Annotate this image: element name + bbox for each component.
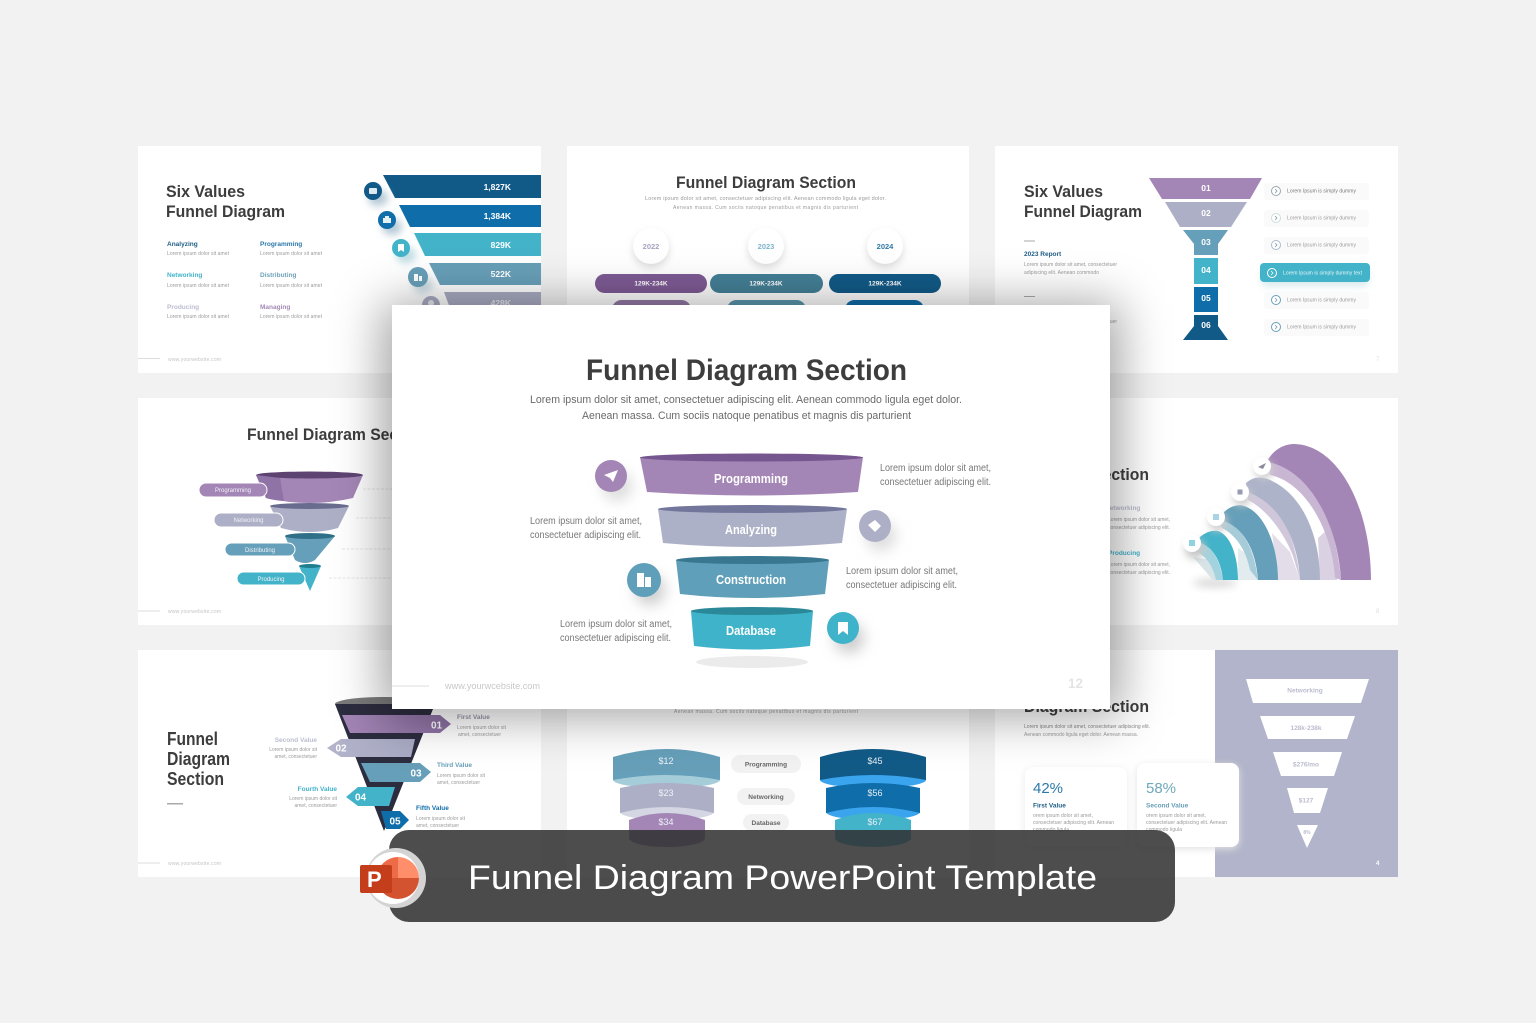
text block: value list: Lorem ipsum dolor sit amet: [260, 283, 323, 289]
panel: arc funnel slide (middle right): [960, 398, 1398, 625]
title: Funnel Diagram Section: [586, 354, 907, 387]
chart: right stacked funnel: [820, 749, 926, 847]
year badges: 2024: [877, 242, 894, 251]
text block: value list: Lorem ipsum dolor sit amet: [260, 251, 323, 257]
heading: Six Values: [1024, 182, 1103, 201]
label pills: [199, 483, 305, 585]
text: programming description: [880, 463, 991, 488]
footer: [138, 357, 221, 363]
icon: PowerPoint logo: P: [367, 867, 382, 892]
chart: hourglass funnel: [1149, 178, 1262, 340]
chart: horizontal funnel bars: 522K: [491, 269, 512, 279]
subtitle: Aenean massa. Cum sociis natoque penatibus et magnis dis parturient: [582, 410, 911, 422]
text block: value list: Lorem ipsum dolor sit amet: [167, 283, 230, 289]
value pills: 129K-234K: [868, 280, 902, 288]
chart: hourglass funnel: 03: [1201, 237, 1211, 247]
chart: right stacked funnel: $67: [867, 817, 883, 827]
footer: www.yourwebsite.com: [168, 357, 221, 363]
subtitle: [530, 394, 962, 422]
card: first value: consectetuer adipiscing elit. Aenean: [1033, 820, 1114, 826]
card: first value: commodo ligula: [1033, 827, 1069, 833]
value labels: Lorem ipsum dolor sit: [289, 796, 338, 802]
text block: Lorem ipsum dolor sit amet,: [1108, 562, 1170, 568]
panel: six values funnel slide (top left): [138, 146, 541, 373]
text block: value list: Programming: [260, 241, 302, 248]
chart: horizontal funnel bars: 428K: [491, 298, 512, 308]
text block: value list: Analyzing: [167, 241, 198, 248]
value labels: Fourth Value: [298, 786, 337, 793]
value labels: amet, consectetuer: [437, 780, 480, 786]
text: database description: consectetuer adipiscing elit.: [560, 633, 671, 644]
text block: Aenean massa. Cum sociis natoque penatibus et magnis dis parturient: [674, 709, 859, 715]
value labels: amet, consectetuer: [458, 732, 501, 738]
footer: [138, 861, 221, 867]
icon: paper plane: [595, 460, 632, 501]
text block: value list: Distributing: [260, 272, 296, 279]
text block: Networking: [1105, 505, 1140, 512]
heading: [167, 729, 230, 789]
text: programming description: Lorem ipsum dolor sit amet,: [880, 463, 991, 474]
panel: cone funnel slide (bottom left): [138, 650, 541, 877]
list rows: Lorem Ipsum is simply dummy: [1287, 324, 1356, 330]
divider: [167, 803, 183, 804]
list rows: Lorem Ipsum is simply dummy text: [1283, 270, 1363, 276]
funnel: construction: Construction: [716, 573, 786, 587]
text block: [645, 196, 886, 211]
text block: 2023 report: 2023 Report: [1024, 251, 1062, 258]
heading: Funnel Diagram Section: [676, 173, 856, 192]
value labels: Fifth Value: [416, 805, 449, 812]
value labels: amet, consectetuer: [416, 823, 459, 829]
value labels: Lorem ipsum dolor sit: [437, 773, 486, 779]
labels: center pills: Database: [752, 820, 781, 827]
icons: funnel bar badges: [364, 182, 440, 314]
heading: Diagram: [167, 749, 230, 769]
title banner: Funnel Diagram PowerPoint Template: [468, 859, 1097, 897]
text block: 2023 report: Lorem ipsum dolor sit amet, consectetuer: [1024, 319, 1117, 325]
chart: hourglass funnel: 01: [1201, 183, 1211, 193]
value labels: amet, consectetuer: [294, 803, 337, 809]
text: database description: Lorem ipsum dolor sit amet,: [560, 619, 672, 630]
chart: cone with arrows: [327, 697, 451, 831]
card: second value: 58%: [1146, 780, 1176, 797]
connector lines: [329, 489, 392, 578]
list rows: Lorem Ipsum is simply dummy: [1287, 298, 1356, 304]
label pills: Producing: [257, 577, 285, 583]
card: first value: [1025, 767, 1127, 849]
chart: right stacked funnel: $45: [867, 756, 883, 766]
heading: Diagram Section: [1024, 697, 1149, 716]
card: first value: orem ipsum dolor sit amet,: [1033, 813, 1093, 819]
funnel floor shadow: [696, 656, 808, 668]
card: second value: [1137, 763, 1239, 849]
heading: [1024, 182, 1142, 221]
text: analyzing description: [530, 516, 642, 541]
card: first value: First Value: [1033, 802, 1066, 810]
funnel: analyzing: [658, 505, 847, 547]
text block: value list: Managing: [260, 304, 290, 311]
chart: cone with arrows: 05: [389, 816, 401, 828]
page number: 7: [1376, 357, 1380, 363]
text: construction description: [846, 566, 958, 591]
label pills: Networking: [233, 518, 264, 524]
text block: Producing: [1108, 550, 1140, 557]
card: second value: Second Value: [1146, 802, 1189, 810]
side panel with funnel: 8%: [1303, 830, 1311, 836]
text block: value list: Lorem ipsum dolor sit amet: [167, 314, 230, 320]
labels: center pills: Programming: [745, 762, 787, 768]
icon: tag: [859, 510, 896, 551]
heading: six values funnel diagram: Six Values: [166, 182, 245, 201]
chart: left stacked funnel: $23: [658, 788, 674, 798]
icon: buildings: [627, 563, 665, 605]
text block: value list: Producing: [167, 304, 199, 311]
text: construction description: consectetuer adipiscing elit.: [846, 580, 957, 591]
heading: six values funnel diagram: [166, 182, 285, 221]
text: construction description: Lorem ipsum dolor sit amet,: [846, 566, 958, 577]
card: second value: consectetuer adipiscing elit. Aenean: [1146, 820, 1227, 826]
value pills: [595, 274, 941, 319]
value labels: Lorem ipsum dolor sit: [457, 725, 507, 731]
title banner: [389, 830, 1175, 922]
chart: left stacked funnel: $12: [658, 756, 674, 766]
text block: Aenean commodo ligula eget dolor. Aenean massa.: [1024, 732, 1138, 738]
text block: 2023 report: adipiscing elit. Aenean commodo: [1024, 270, 1099, 276]
footer: www.yourwcebsite.com: [444, 681, 540, 692]
side panel with funnel: $276/mo: [1293, 762, 1319, 768]
icon: PowerPoint logo: [360, 848, 426, 908]
footer: [138, 609, 221, 615]
chart: nested arcs: [1193, 444, 1371, 588]
icon badges: [1183, 457, 1273, 559]
value labels: Third Value: [437, 762, 472, 769]
text block: Aenean massa. Cum sociis natoque penatibus et magnis dis parturient: [673, 205, 859, 211]
value labels: [269, 714, 507, 829]
heading: Funnel Diagram: [1024, 202, 1142, 221]
heading: six values funnel diagram: Funnel Diagram: [166, 202, 285, 221]
list rows: Lorem Ipsum is simply dummy: [1287, 216, 1356, 222]
text block: consectetuer adipiscing elit.: [1108, 525, 1170, 531]
chart: horizontal funnel bars: [383, 175, 541, 316]
heading: Funnel: [167, 729, 218, 749]
subtitle: Lorem ipsum dolor sit amet, consectetuer adipiscing elit. Aenean commodo ligula eget dolor.: [530, 394, 962, 406]
value pills: 129K-234K: [749, 280, 783, 288]
side panel with funnel: Networking: [1287, 688, 1323, 694]
text block: [1024, 724, 1150, 738]
side panel with funnel: $127: [1299, 798, 1314, 804]
heading: Funnel Diagram Section: [969, 465, 1149, 484]
funnel: database: Database: [726, 624, 776, 638]
panel: 3D funnel slide (middle left): [138, 398, 438, 625]
panel: main funnel slide: [392, 305, 1110, 709]
text block: value list: Lorem ipsum dolor sit amet: [260, 314, 323, 320]
chart: hourglass funnel: 05: [1201, 293, 1211, 303]
text block: 2023 report: Lorem ipsum dolor sit amet, consectetuer: [1024, 262, 1117, 268]
page number: 4: [1376, 861, 1380, 867]
chart: right stacked funnel: $56: [867, 788, 883, 798]
funnel: analyzing: Analyzing: [725, 523, 777, 537]
side panel with funnel: [1215, 650, 1398, 877]
text block: value list: [167, 241, 323, 320]
list rows: Lorem Ipsum is simply dummy: [1287, 188, 1356, 194]
year badges: [633, 228, 903, 268]
card: second value: orem ipsum dolor sit amet,: [1146, 813, 1206, 819]
text block: Lorem ipsum dolor sit amet, consectetuer adipiscing elit. Aenean commodo ligula eget dolor.: [645, 196, 886, 202]
text block: value list: Networking: [167, 272, 202, 279]
text block: 2023 report: [1024, 240, 1117, 325]
side panel with funnel: 128k-238k: [1290, 725, 1322, 732]
chart: left stacked funnel: $34: [658, 817, 674, 827]
value labels: Second Value: [275, 737, 317, 744]
value labels: amet, consectetuer: [274, 754, 317, 760]
shadow behind main slide: [382, 303, 1120, 717]
labels: center pills: [731, 755, 801, 831]
text block: Lorem ipsum dolor sit amet,: [1108, 517, 1170, 523]
text: database description: [560, 619, 672, 644]
text: analyzing description: Lorem ipsum dolor sit amet,: [530, 516, 642, 527]
label pills: Programming: [215, 488, 251, 494]
value labels: First Value: [457, 714, 490, 721]
text block: value list: Lorem ipsum dolor sit amet: [167, 251, 230, 257]
list rows: [1260, 183, 1370, 336]
heading: Section: [167, 769, 224, 789]
chart: hourglass funnel: 06: [1201, 320, 1211, 330]
value labels: Lorem ipsum dolor sit: [416, 816, 466, 822]
list rows: Lorem Ipsum is simply dummy: [1287, 242, 1356, 248]
chart: left stacked funnel: [613, 749, 720, 847]
funnel: database: [691, 607, 813, 650]
footer: www.yourwebsite.com: [168, 609, 221, 615]
icon: bookmark: [827, 612, 864, 653]
panel: six values funnel slide (top right): [995, 146, 1398, 373]
heading: Funnel Diagram Section: [247, 425, 427, 444]
chart: cone with arrows: 02: [335, 744, 347, 754]
chart: hourglass funnel: 02: [1201, 208, 1211, 218]
card: second value: commodo ligula: [1146, 827, 1182, 833]
chart: 3D funnel: [256, 472, 363, 591]
footer: www.yourwebsite.com: [168, 861, 221, 867]
funnel: construction: [676, 556, 829, 598]
panel: stacked funnels slide (bottom middle): [567, 650, 969, 877]
funnel: programming: Programming: [714, 472, 788, 486]
labels: center pills: Networking: [748, 794, 784, 801]
chart: horizontal funnel bars: 829K: [491, 240, 512, 250]
text: programming description: consectetuer adipiscing elit.: [880, 477, 991, 488]
text block: [1105, 505, 1170, 576]
funnel: programming: [640, 454, 863, 496]
chart: cone with arrows: 04: [355, 792, 366, 804]
chart: cone with arrows: 03: [410, 768, 422, 780]
page number: 12: [1068, 676, 1083, 691]
year badges: 2023: [758, 242, 774, 251]
chart: horizontal funnel bars: 1,384K: [484, 211, 512, 221]
page number: 8: [1376, 609, 1380, 615]
panel: percent cards slide (bottom right): [995, 650, 1398, 877]
card: first value: 42%: [1033, 780, 1063, 797]
label pills: Distributing: [245, 548, 275, 554]
year badges: 2022: [643, 242, 659, 251]
panel: funnel section slide with years (top middle): [567, 146, 969, 373]
chart: hourglass funnel: 04: [1201, 265, 1211, 275]
value pills: 129K-234K: [634, 280, 668, 288]
text block: Lorem ipsum dolor sit amet, consectetuer adipiscing elit.: [1024, 724, 1150, 730]
value labels: Lorem ipsum dolor sit: [269, 747, 318, 753]
text: analyzing description: consectetuer adipiscing elit.: [530, 530, 641, 541]
text block: consectetuer adipiscing elit.: [1108, 570, 1170, 576]
chart: cone with arrows: 01: [431, 720, 442, 732]
chart: horizontal funnel bars: 1,827K: [484, 182, 512, 192]
